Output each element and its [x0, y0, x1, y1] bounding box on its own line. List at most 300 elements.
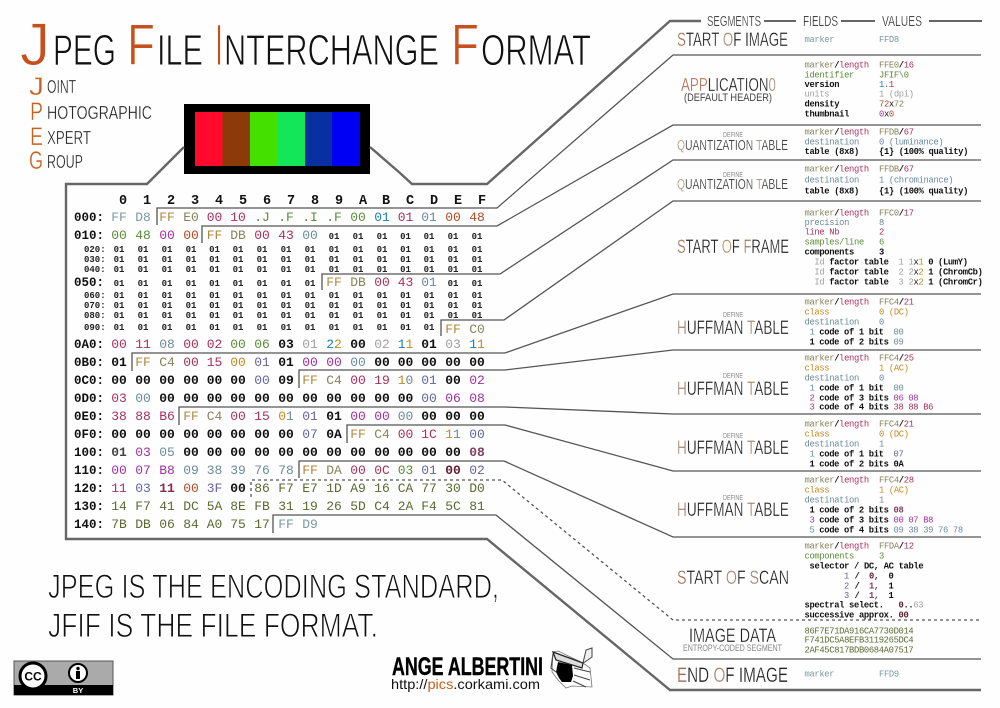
hex dump rows: 01 [162, 323, 173, 333]
hex dump rows: 01 [305, 245, 316, 255]
hex dump rows: 01 [448, 311, 459, 321]
segment: quantization table 1: /length [834, 164, 869, 174]
segment: start of frame: 0 [928, 258, 933, 268]
hex dump rows: .F [278, 210, 294, 225]
author credit: http://pics.corkami.com [391, 676, 540, 692]
column headings [707, 13, 982, 30]
segment: application0: APPLICATION0 [681, 75, 776, 95]
hex dump rows: 01 [421, 210, 437, 225]
segment: start of frame: factor table [829, 268, 889, 278]
hex dump rows: C4 [159, 355, 175, 370]
title: F [451, 13, 479, 78]
hex dump rows: 00 [350, 337, 366, 352]
hex dump rows: 01 [398, 210, 413, 225]
segment: huffman table 3: 1 [879, 440, 884, 450]
title: ILE [157, 26, 203, 75]
hex dump rows: A0 [207, 517, 222, 532]
hex dump rows: 01 [329, 245, 340, 255]
hex dump rows: 01 [472, 311, 483, 321]
segment: quantization table 0: /length [834, 128, 869, 138]
hex dump rows: 01 [472, 255, 483, 265]
hex dump rows: 00 [183, 373, 199, 388]
hex dump rows: A9 [350, 481, 366, 496]
hex dump rows: 01 [448, 232, 459, 242]
hex dump rows: 01 [186, 323, 197, 333]
hex dump rows: 01 [114, 323, 125, 333]
segment: start of frame: components [804, 248, 854, 258]
segment: huffman table 2: 1 [810, 384, 814, 394]
segment: application0: 72x72 [879, 100, 904, 110]
segment: huffman table 4: 1 [879, 496, 884, 506]
segment: huffman table 4: class [804, 486, 829, 496]
hex dump rows: 01 [257, 265, 268, 275]
hex dump rows: 00 [421, 355, 437, 370]
hex dump rows: 02 [207, 337, 222, 352]
statement text: JPEG IS THE ENCODING STANDARD, [48, 568, 499, 606]
hex dump rows: 01 [377, 232, 388, 242]
hex dump rows: C4 [326, 373, 342, 388]
hex dump rows: 01 [233, 291, 244, 301]
segment: start of scan: 2 [844, 582, 849, 592]
hex dump rows: 01 [186, 291, 197, 301]
hex dump rows: 01 [281, 265, 292, 275]
hex dump rows: 00 [230, 409, 246, 424]
hex dump rows: 11 [398, 337, 413, 352]
hex dump rows: 01 [186, 311, 197, 321]
hex dump rows: 01 [138, 245, 149, 255]
hex dump rows: 01 [233, 265, 244, 275]
hex dump rows: 01 [329, 323, 340, 333]
hex dump rows: 00 [374, 409, 390, 424]
segment: quantization table 0: QUANTIZATION TABLE [677, 137, 788, 154]
hex dump rows: 01 [114, 265, 125, 275]
title: F [127, 13, 155, 78]
hex dump rows: D8 [135, 210, 151, 225]
hex dump rows: 01 [114, 279, 125, 289]
segment: end of image: FFD9 [879, 670, 899, 680]
hex dump rows: 08 [469, 445, 485, 460]
hex dump rows: 00 [374, 355, 390, 370]
hex dump rows: 050: [74, 276, 104, 290]
hex dump rows: 01 [209, 245, 220, 255]
segment: start of frame: 1 [898, 258, 904, 268]
segment: application0: /16 [899, 60, 914, 70]
hex dump rows: 01 [209, 291, 220, 301]
hex dump rows: 00 [254, 445, 270, 460]
hex dump rows: FF [207, 228, 222, 243]
hex dump rows: 01 [257, 245, 268, 255]
hex dump rows: 01 [400, 255, 411, 265]
hex dump rows: 01 [424, 301, 435, 311]
segment: application0: thumbnail [804, 110, 849, 120]
hex dump frame [66, 147, 981, 690]
hex dump rows: 00 [302, 355, 318, 370]
hex dump rows: 03 [278, 337, 294, 352]
hex dump rows: 01 [111, 445, 127, 460]
hex dump rows: 01 [424, 265, 435, 275]
hex dump rows: 02 [374, 337, 390, 352]
hex dump rows: 01 [257, 291, 268, 301]
segment: start of scan: 1 [888, 582, 894, 592]
hex dump rows: 00 [111, 427, 127, 442]
hex dump rows: 78 [278, 463, 294, 478]
segment: huffman table 4: destination [804, 496, 859, 506]
hex dump rows: 00 [374, 445, 390, 460]
hex dump rows: 31 [278, 499, 294, 514]
segment: start of scan: 00 [898, 610, 908, 620]
segment: huffman table 4: 5 [810, 526, 814, 536]
hex dump rows: 06 [254, 337, 270, 352]
hex dump rows: 11 [111, 481, 127, 496]
hex dump rows: 01 [114, 301, 125, 311]
hex dump rows: 0C0: [74, 374, 104, 388]
hex dump rows: 01 [114, 245, 125, 255]
hex dump rows: 00 [230, 445, 246, 460]
hex dump rows: FF [135, 355, 151, 370]
segment: start of frame: Id [814, 268, 824, 278]
segment: application0: (DEFAULT HEADER) [684, 92, 772, 104]
hex column header: C [406, 194, 414, 209]
segment: huffman table 4 [677, 476, 963, 536]
hex dump rows: 00 [445, 409, 461, 424]
segment: huffman table 4: DEFINE [723, 495, 743, 502]
hex dump rows: 01 [138, 291, 149, 301]
segment: start of image: START OF IMAGE [677, 30, 788, 51]
hex dump rows: 01 [138, 255, 149, 265]
hex dump rows: 020: [84, 245, 106, 255]
hex dump rows: 130: [74, 500, 104, 514]
hex dump rows: 0E0: [74, 410, 104, 424]
hex dump rows: 09 [183, 463, 199, 478]
hex dump rows: 01 [233, 255, 244, 265]
segment: start of scan: /12 [899, 542, 914, 552]
hex dump rows: 01 [329, 301, 340, 311]
hex dump rows: 00 [183, 427, 199, 442]
hex dump rows: 01 [138, 311, 149, 321]
segment: huffman table 1: FFC4 [879, 298, 899, 308]
hex dump rows: 01 [424, 291, 435, 301]
segment: start of scan: 3 [879, 552, 884, 562]
segment: quantization table 0: {1} (100% quality) [879, 147, 968, 157]
licence badge: CC BY [14, 661, 113, 695]
segment: start of frame: (ChromCb) [938, 268, 983, 278]
segment: start of scan: 1 [844, 572, 849, 582]
statement text [48, 568, 499, 645]
hex dump rows: 00 [111, 337, 127, 352]
segment: huffman table 3: /length [834, 420, 869, 430]
hex dump rows: 00 [350, 445, 366, 460]
hex column header: 2 [167, 194, 175, 209]
hex dump rows: 01 [472, 279, 483, 289]
segment: huffman table 2 [677, 354, 933, 412]
hex dump rows: FF [302, 463, 318, 478]
segment: start of scan: / [854, 582, 860, 592]
hex dump rows: 01 [162, 291, 173, 301]
hex dump rows: 00 [183, 481, 199, 496]
hex dump rows: 01 [353, 311, 364, 321]
hex column header: A [359, 194, 368, 209]
hex dump rows: 01 [233, 301, 244, 311]
hex dump rows: 00 [254, 228, 270, 243]
segment: start of frame: 2x2 [908, 278, 923, 288]
hex dump rows: 01 [305, 279, 316, 289]
hex dump rows: 01 [138, 323, 149, 333]
hex dump rows: 8E [230, 499, 246, 514]
segment: start of frame: factor table [829, 278, 889, 288]
hex dump rows: 01 [377, 291, 388, 301]
segment: start of frame: 3 [898, 278, 904, 288]
hex dump rows: 43 [278, 228, 294, 243]
hex column header: F [478, 194, 486, 209]
hex dump rows: FF [445, 322, 461, 337]
hex dump rows: 01 [400, 291, 411, 301]
segment: start of frame [677, 208, 983, 288]
acronym list: OINT [47, 77, 76, 97]
hex dump rows: 00 [159, 427, 175, 442]
hex column header: 8 [311, 194, 319, 209]
hex column header: 0 [119, 194, 127, 209]
segment: huffman table 4: 08 [894, 506, 903, 516]
segment: quantization table 1: FFDB [879, 164, 899, 174]
hex dump rows: 01 [302, 409, 318, 424]
hex dump rows: 00 [350, 463, 366, 478]
hex dump rows: 03 [111, 391, 127, 406]
segment: image data: 86F7E71DA916CA7730D014 [804, 626, 913, 636]
hex dump rows: 01 [329, 232, 340, 242]
segment: quantization table 1: QUANTIZATION TABLE [677, 176, 788, 193]
segment: huffman table 4: FFC4 [879, 476, 899, 486]
hex dump rows: 01 [209, 255, 220, 265]
segment: huffman table 1 [677, 298, 914, 348]
hex dump rows: D0 [469, 481, 485, 496]
hex dump rows: 000: [74, 211, 104, 225]
hex dump rows: 02 [469, 463, 485, 478]
segment: application0: units [804, 90, 829, 100]
hex dump rows: 10 [230, 210, 246, 225]
segment: quantization table 1: DEFINE [723, 172, 743, 179]
hex dump rows: 7B [111, 517, 127, 532]
hex dump rows: 01 [209, 301, 220, 311]
hex dump rows: 22 [326, 337, 342, 352]
hex dump rows: 01 [472, 265, 483, 275]
segment: huffman table 3: /21 [899, 420, 914, 430]
segment: quantization table 0: table (8x8) [804, 147, 859, 157]
segment: start of frame: /17 [899, 208, 914, 218]
hex dump rows: 01 [305, 323, 316, 333]
acronym list: HOTOGRAPHIC [47, 103, 152, 123]
segment: start of frame: 1 [928, 278, 933, 288]
hex dump rows: 01 [472, 245, 483, 255]
hex dump rows: 01 [257, 323, 268, 333]
hex dump rows: 00 [183, 445, 199, 460]
hex dump rows: 100: [74, 446, 104, 460]
hex dump rows: F7 [135, 499, 151, 514]
segment: start of frame: (LumY) [938, 258, 968, 268]
segment: huffman table 2: 3 [810, 402, 814, 412]
segment: end of image [677, 664, 899, 687]
column headings: FIELDS [803, 13, 838, 30]
hex dump rows: 00 [183, 228, 199, 243]
hex dump rows: 01 [254, 355, 270, 370]
hex dump rows: 00 [398, 445, 413, 460]
hex dump rows: DB [230, 228, 246, 243]
hex dump rows: 01 [326, 409, 342, 424]
hex dump rows: 01 [281, 311, 292, 321]
segment: huffman table 3: class [804, 430, 829, 440]
hex dump rows: 01 [448, 265, 459, 275]
segment: huffman table 4: code of 2 bits [819, 506, 889, 516]
hex dump rows: DB [350, 275, 366, 290]
segment: start of scan: components [804, 552, 854, 562]
segment: end of image: END OF IMAGE [677, 664, 788, 687]
hex dump rows: 01 [257, 279, 268, 289]
segment: start of scan: ..63 [903, 600, 923, 610]
segment: start of frame: /length [834, 208, 869, 218]
hex dump rows: 01 [421, 337, 437, 352]
hex dump rows: 00 [421, 391, 437, 406]
title [20, 11, 591, 78]
hex dump rows: 00 [207, 210, 222, 225]
hex dump rows: 01 [138, 301, 149, 311]
hex dump rows: DA [326, 463, 342, 478]
hex dump rows: 48 [135, 228, 151, 243]
hex dump rows: 01 [421, 373, 437, 388]
column headings: SEGMENTS [707, 13, 761, 30]
hex dump rows: 01 [448, 245, 459, 255]
segment: application0: /length [834, 60, 869, 70]
hex dump rows: 01 [162, 265, 173, 275]
hex dump rows: 01 [209, 279, 220, 289]
hex dump rows: C0 [469, 322, 485, 337]
segment: start of scan: marker [804, 542, 834, 552]
segment: huffman table 2: code of 4 bits [819, 402, 889, 412]
hex dump rows: 07 [302, 427, 318, 442]
hex dump rows: 01 [257, 255, 268, 265]
acronym list: J [29, 73, 44, 101]
hex dump rows: 00 [350, 409, 366, 424]
hex dump rows: 01 [353, 301, 364, 311]
segment: huffman table 3: 1 [810, 450, 814, 460]
hex dump rows: 010: [74, 229, 104, 243]
acronym list [29, 73, 152, 175]
hex dump rows: 01 [424, 255, 435, 265]
segment: image data: ENTROPY-CODED SEGMENT [683, 643, 782, 653]
hex dump rows: 01 [353, 323, 364, 333]
hex dump rows: 01 [305, 311, 316, 321]
segment: quantization table 1: /67 [899, 164, 914, 174]
hex dump rows: 11 [159, 481, 175, 496]
hex dump rows: FF [326, 275, 342, 290]
hex dump rows: 09 [278, 373, 294, 388]
segment: start of frame: factor table [829, 258, 889, 268]
hex dump rows: 00 [135, 391, 151, 406]
hex dump rows: 00 [254, 391, 270, 406]
segment: huffman table 2: HUFFMAN TABLE [677, 379, 789, 400]
hex dump rows: .I [302, 210, 318, 225]
hex dump rows: 01 [472, 291, 483, 301]
hex dump rows: 00 [230, 355, 246, 370]
hex dump rows: 080: [84, 311, 106, 321]
author credit [391, 653, 543, 692]
segment: start of frame: 1 [928, 268, 933, 278]
hex dump rows: 00 [183, 337, 199, 352]
hex dump rows: 00 [469, 427, 485, 442]
hex dump rows: 01 [209, 311, 220, 321]
segment: huffman table 2: code of 3 bits [819, 394, 889, 404]
licence badge: CC BY: BY [73, 686, 83, 695]
hex dump rows: 00 [350, 391, 366, 406]
segment: start of scan: FFDA [879, 542, 900, 552]
title: J [20, 11, 50, 78]
hex dump rows: DC [183, 499, 199, 514]
segment: quantization table 0: DEFINE [723, 132, 743, 139]
segment: start of scan: /length [834, 542, 869, 552]
hex dump rows: 01 [448, 279, 459, 289]
hex dump rows: 08 [159, 337, 175, 352]
segment: huffman table 4: code of 4 bits [819, 526, 889, 536]
hex dump rows: 14 [111, 499, 127, 514]
hex dump rows: 01 [209, 265, 220, 275]
hex dump rows: 01 [400, 301, 411, 311]
hex dump rows: 01 [281, 255, 292, 265]
hex dump rows: 00 [469, 409, 485, 424]
segment: huffman table 2: 2 [810, 394, 814, 404]
hex dump rows: 00 [135, 373, 151, 388]
hex dump rows: 0C [374, 463, 390, 478]
hex column header: 1 [143, 194, 151, 209]
hex dump rows: 00 [207, 427, 222, 442]
hex dump rows: FF [159, 210, 175, 225]
hex dump rows: 11 [135, 337, 151, 352]
column headings: VALUES [882, 13, 922, 30]
hex dump rows: 00 [230, 427, 246, 442]
segment: huffman table 3: code of 2 bits [819, 460, 889, 470]
segment: application0: 1.1 [879, 80, 894, 90]
segment: huffman table 2: 00 [894, 384, 903, 394]
hex dump rows: .F [326, 210, 342, 225]
hex dump rows: 1C [421, 427, 437, 442]
hex dump rows: 00 [183, 355, 199, 370]
segment: start of image [677, 30, 899, 51]
hex dump rows: 01 [377, 255, 388, 265]
author credit: ANGE ALBERTINI [392, 653, 543, 681]
hex dump rows: 16 [374, 481, 390, 496]
segment: huffman table 2: /length [834, 354, 869, 364]
hex column header: 3 [191, 194, 199, 209]
segment: start of image: FFD8 [879, 35, 899, 45]
segment: start of frame: 2x2 [908, 268, 923, 278]
segment: application0: density [804, 100, 840, 110]
acronym list: E [30, 123, 43, 151]
frame top to segments header line [370, 21, 701, 184]
segment: huffman table 1: code of 2 bits [819, 338, 889, 348]
hex dump rows: 00 [445, 210, 461, 225]
hex dump rows: 01 [353, 265, 364, 275]
hex dump rows: C4 [374, 499, 390, 514]
segment: application0: version [804, 80, 839, 90]
hex dump rows: 01 [305, 291, 316, 301]
sample image: colour bars [184, 104, 370, 174]
hex dump rows: 26 [326, 499, 342, 514]
segment: huffman table 2: 0 [879, 374, 884, 384]
segment: huffman table 1: destination [804, 318, 859, 328]
segment: quantization table 1: destination [804, 176, 859, 186]
segment: huffman table 1: /length [834, 298, 869, 308]
hex dump rows: 01 [281, 279, 292, 289]
hex dump rows: D9 [302, 517, 318, 532]
icon: author head [551, 648, 592, 688]
hex column header: 5 [239, 194, 247, 209]
